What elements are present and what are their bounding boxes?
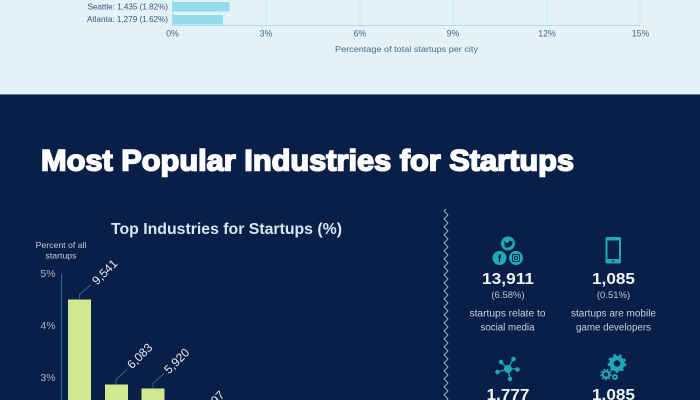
x axis labels: 15%	[632, 28, 649, 38]
bar 3	[142, 345, 193, 400]
bar chart: top industries	[36, 240, 228, 400]
stat: mobile game developers: startups are mobile	[571, 308, 656, 320]
y axis labels: 4%	[40, 320, 56, 332]
stat: network	[486, 357, 530, 400]
icon: social media circles: f	[498, 254, 502, 265]
stat: mobile game developers: 1,085	[592, 271, 635, 288]
bar 2: 6,083	[124, 340, 156, 372]
x axis labels	[166, 28, 649, 38]
icon: network nodes	[496, 357, 519, 381]
heading: most popular industries: Most Popular Industries for Startups	[41, 144, 574, 178]
icon: smartphone	[606, 237, 621, 264]
y axis labels	[40, 268, 56, 384]
x axis labels: 0%	[166, 28, 179, 38]
bar 3: 5,920	[161, 345, 193, 377]
panel: city bar chart section	[0, 0, 700, 95]
x axis title: Percentage of total startups per city	[335, 44, 479, 54]
stat: social media: social media	[480, 322, 535, 334]
bar 1	[68, 256, 121, 400]
bar: Seattle: Seattle: 1,435 (1.82%)	[88, 2, 168, 12]
bar: Atlanta	[87, 15, 223, 24]
x axis labels: 9%	[447, 28, 460, 38]
chart title: Top Industries for Startups (%)	[111, 221, 342, 238]
divider: wavy line	[444, 209, 448, 400]
panel: industries section	[0, 95, 700, 400]
stat: social media	[470, 236, 546, 334]
x axis labels: 12%	[538, 28, 556, 38]
y axis title: Percent of all	[36, 240, 86, 250]
stat: social media: (6.58%)	[491, 290, 525, 301]
bar: Atlanta: Atlanta: 1,279 (1.62%)	[87, 15, 168, 24]
bar 2	[105, 340, 156, 400]
stat: social media: 13,911	[482, 271, 534, 288]
stat: mobile game developers	[571, 237, 656, 334]
y axis labels: 5%	[40, 268, 56, 280]
bar 1: 9,541	[89, 256, 121, 288]
stat: mobile game developers: (0.51%)	[597, 290, 630, 301]
icon: gears	[601, 355, 626, 380]
stat: mobile game developers: game developers	[576, 322, 651, 334]
bar: Seattle	[88, 2, 230, 12]
x axis labels: 6%	[354, 28, 367, 38]
x axis labels: 3%	[260, 28, 273, 38]
y axis title: startups	[46, 250, 77, 260]
stat: social media: startups relate to	[470, 308, 546, 320]
stat: gears	[592, 355, 635, 400]
y axis title	[36, 240, 86, 260]
y axis labels: 3%	[40, 372, 56, 384]
